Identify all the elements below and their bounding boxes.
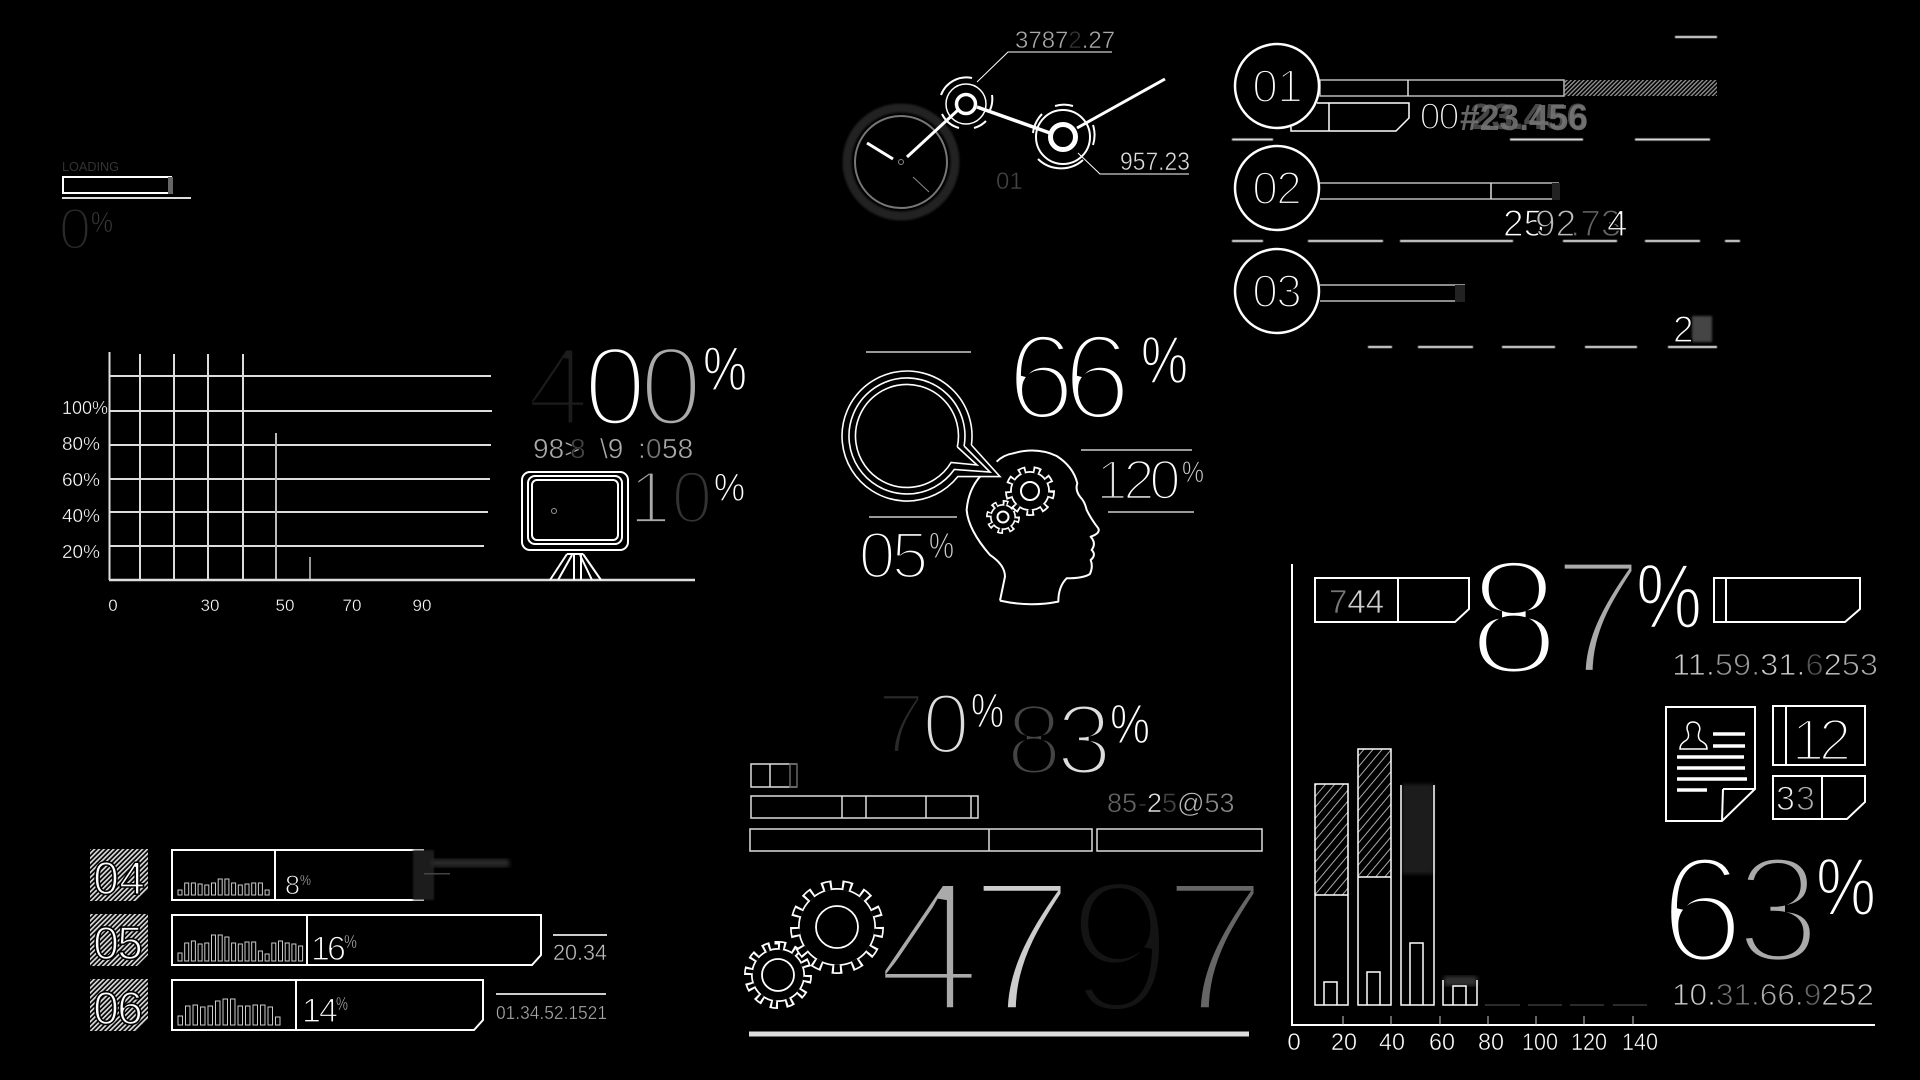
large gear (794, 884, 880, 970)
bar 04: % (300, 872, 311, 889)
stat: 05 percent (859, 517, 957, 592)
stat: 120 percent (1081, 448, 1204, 512)
stat: 87 percent (1468, 525, 1702, 709)
axis labels: 60 (1429, 1029, 1455, 1056)
panel: numbered bars 01 to 03 (1232, 36, 1740, 350)
tag: blank right (1714, 578, 1860, 622)
x axis labels: 70 (343, 596, 361, 615)
badge 06: 0 (93, 982, 119, 1034)
dashed rules (1232, 36, 1740, 348)
percent sign: % (1636, 546, 1702, 648)
axis labels: 120 (1571, 1029, 1607, 1056)
axis labels: 80 (1478, 1029, 1504, 1056)
percent sign: % (1182, 456, 1204, 489)
row 01 value: 23.456 (1470, 96, 1588, 137)
axis labels: 20 (1331, 1029, 1357, 1056)
row 02 value: 25 (1503, 203, 1544, 244)
icon: gears (748, 884, 880, 1006)
code readout: \9 (600, 433, 623, 464)
bar 04 (172, 850, 509, 900)
bar 05: 1 (311, 930, 330, 968)
row 02 (1235, 146, 1560, 230)
percent sign: % (1816, 842, 1876, 933)
divider (869, 516, 957, 518)
big counter 4797: 4 (876, 841, 982, 1053)
y axis labels: 20% (62, 542, 100, 562)
code readout 85 25@53: 85 (1107, 788, 1137, 818)
bar 06: % (336, 994, 348, 1014)
row 03 (1235, 249, 1465, 333)
row 03 value (1673, 309, 1712, 350)
x axis labels: 50 (276, 596, 294, 615)
badge 04: 4 (119, 852, 145, 904)
code readout: 58 (662, 433, 693, 464)
box: 12: 1 (1792, 708, 1824, 773)
panel: bar chart with axis (1287, 564, 1875, 1056)
stat: 120 percent: 1 (1096, 448, 1128, 511)
loading bar end (168, 177, 173, 194)
bar 2 (1358, 749, 1391, 1005)
node one (941, 77, 992, 128)
small gear (748, 944, 808, 1006)
stat: 66 percent: 6 (1063, 309, 1131, 445)
badge 04: 0 (93, 852, 119, 904)
callout: 957.23: 957.23 (1120, 148, 1190, 176)
stat: 66 percent: 6 (1007, 309, 1075, 445)
tag: 33: 3 (1796, 780, 1815, 818)
icon: clock dial (847, 108, 955, 216)
panel: grid line chart (62, 352, 695, 615)
bar 1 (1315, 784, 1348, 1005)
stat: 83 percent (1006, 684, 1150, 796)
loading label: LOADING (62, 159, 119, 174)
y axis labels: 80% (62, 434, 100, 454)
icon: speech bubble (842, 371, 1000, 501)
bar 3 (1401, 784, 1434, 1005)
badge 04 (90, 849, 148, 904)
axis labels: 140 (1622, 1029, 1658, 1056)
stat: 66 percent (866, 309, 1188, 445)
loading percent: 0 (59, 197, 91, 262)
value 10.31.66.9252: 10.31.66.9252 (1672, 977, 1874, 1012)
bar 06: 1 (302, 992, 321, 1030)
tag: 744 (1315, 578, 1469, 622)
value 11.59.31.6253: 11.59.31.6253 (1672, 647, 1878, 682)
panel: loading widget (59, 159, 191, 262)
row 02: 2 (1276, 162, 1302, 214)
stat: 87 percent: 7 (1552, 525, 1644, 709)
axis labels: 100 (1522, 1029, 1558, 1056)
stat: 83 percent: 8 (1006, 684, 1062, 796)
stat: 10 percent: 0 (671, 456, 713, 539)
code readout 85 25@53: - (1138, 788, 1147, 818)
stat: 87 percent: 8 (1468, 525, 1560, 709)
value 20.34: 20.34 (553, 940, 607, 965)
stat: 63 percent: 3 (1736, 825, 1820, 995)
row 02 value (1503, 203, 1628, 244)
x axis labels: 0 (108, 596, 118, 615)
row 01 (1235, 44, 1717, 131)
badge 05: 5 (117, 917, 143, 969)
empty bar baselines (1485, 1004, 1647, 1006)
stat: 70 percent (877, 677, 1004, 772)
big counter 4797: 7 (969, 841, 1075, 1053)
percent sign: % (929, 525, 954, 566)
tag: 744: 44 (1347, 583, 1384, 620)
loading percent sign: % (91, 207, 113, 239)
badge 05: 0 (93, 917, 119, 969)
head outline (967, 451, 1099, 604)
callout: 3787.27: 2.27 (1068, 27, 1115, 54)
icon: presentation monitor (522, 472, 628, 580)
callout: 3787.27: 3787 (1015, 27, 1068, 54)
tag: 33 (1773, 776, 1865, 819)
stat: 70 percent: 7 (877, 677, 925, 772)
stat: 400 percent: 0 (584, 324, 646, 449)
bar 05: 6 (327, 930, 346, 968)
x axis labels (108, 596, 431, 615)
stat: 10 percent (629, 456, 745, 539)
bar 4 (1443, 976, 1477, 1005)
y axis labels: 40% (62, 506, 100, 526)
percent sign: % (1141, 323, 1188, 398)
percent sign: % (1110, 692, 1150, 755)
y axis labels: 100% (62, 398, 108, 418)
row 01 value: #23.456 (1460, 97, 1588, 138)
tag: 33: 3 (1776, 780, 1795, 818)
y axis and grid (109, 352, 695, 580)
row 03: 0 (1252, 265, 1278, 317)
panel: hatched bars 04 to 06 (90, 849, 607, 1034)
axis labels (1287, 1029, 1658, 1056)
y axis labels (62, 398, 108, 562)
code readout: : (638, 433, 646, 464)
stat: 05 percent: 0 (859, 518, 895, 592)
icon: resume document (1666, 707, 1755, 821)
stat: 400 percent: 0 (640, 324, 702, 449)
loading bar (63, 177, 171, 193)
stat: 120 percent: 2 (1123, 448, 1155, 511)
row 02 value: .73 (1570, 203, 1621, 244)
row 03 value: 2 (1673, 309, 1694, 350)
row 01: 1 (1277, 60, 1303, 112)
underline rule (749, 1032, 1249, 1036)
code readout 85 25@53: 2 (1147, 788, 1162, 818)
badge 06: 6 (117, 982, 143, 1034)
stat: 63 percent (1660, 825, 1876, 995)
x axis labels: 30 (201, 596, 219, 615)
box: 12: 2 (1819, 708, 1851, 773)
code readout: 98> (533, 433, 580, 464)
stat: 400 percent: 4 (527, 324, 589, 449)
row 02 value: 92 (1535, 203, 1576, 244)
row 02 value: 4 (1607, 203, 1628, 244)
stat: 83 percent: 3 (1056, 684, 1112, 796)
row 01: 0 (1252, 60, 1278, 112)
small gear (988, 502, 1018, 532)
icon: head with gears (967, 451, 1099, 604)
stat: 120 percent: 0 (1149, 448, 1181, 511)
stat: 63 percent: 6 (1660, 825, 1744, 995)
loading underline (62, 197, 191, 199)
row 02: 0 (1252, 162, 1278, 214)
bar 06: 4 (319, 992, 338, 1030)
x axis labels: 90 (413, 596, 431, 615)
axes (1292, 564, 1875, 1025)
axis labels: 0 (1287, 1029, 1301, 1056)
stat: 400 percent (527, 324, 747, 449)
big counter 4797: 9 (1067, 841, 1173, 1053)
y axis labels: 60% (62, 470, 100, 490)
big counter 4797: 7 (1162, 841, 1268, 1053)
callout: 3787.27 (977, 27, 1115, 82)
ticks (1343, 1016, 1633, 1025)
box: 12 (1773, 706, 1865, 773)
row 03: 3 (1276, 265, 1302, 317)
value 01.34.52.1521: 01.34.52.1521 (496, 1003, 607, 1023)
code readout 85 25@53: 5@53 (1162, 788, 1235, 818)
chart: network line with target nodes (907, 77, 1165, 168)
value 01.34.52.1521 (496, 994, 607, 1023)
bar 06 (172, 980, 483, 1030)
percent sign: % (714, 467, 745, 510)
tag: 744: 7 (1329, 583, 1347, 620)
callout: 957.23 (1078, 148, 1190, 176)
bar 04: 8 (285, 870, 300, 900)
bar 05 (172, 915, 541, 968)
dim counter: 01 (996, 168, 1023, 195)
segmented bars (750, 764, 1262, 851)
badge 06 (90, 979, 148, 1034)
row 01 value: 0 (1439, 96, 1459, 137)
stat: 10 percent: 1 (629, 456, 671, 539)
code readout: 8 (570, 433, 586, 464)
axis labels: 40 (1379, 1029, 1405, 1056)
stat: 05 percent: 5 (892, 518, 928, 592)
node two (1033, 105, 1095, 168)
stat: 70 percent: 0 (922, 677, 970, 772)
bar 05: % (344, 932, 357, 952)
percent sign: % (703, 335, 747, 404)
badge 05 (90, 914, 148, 969)
code readout: 0 (646, 433, 662, 464)
large gear (1008, 468, 1052, 514)
row 01 value: 0 (1420, 96, 1440, 137)
percent sign: % (971, 685, 1004, 738)
